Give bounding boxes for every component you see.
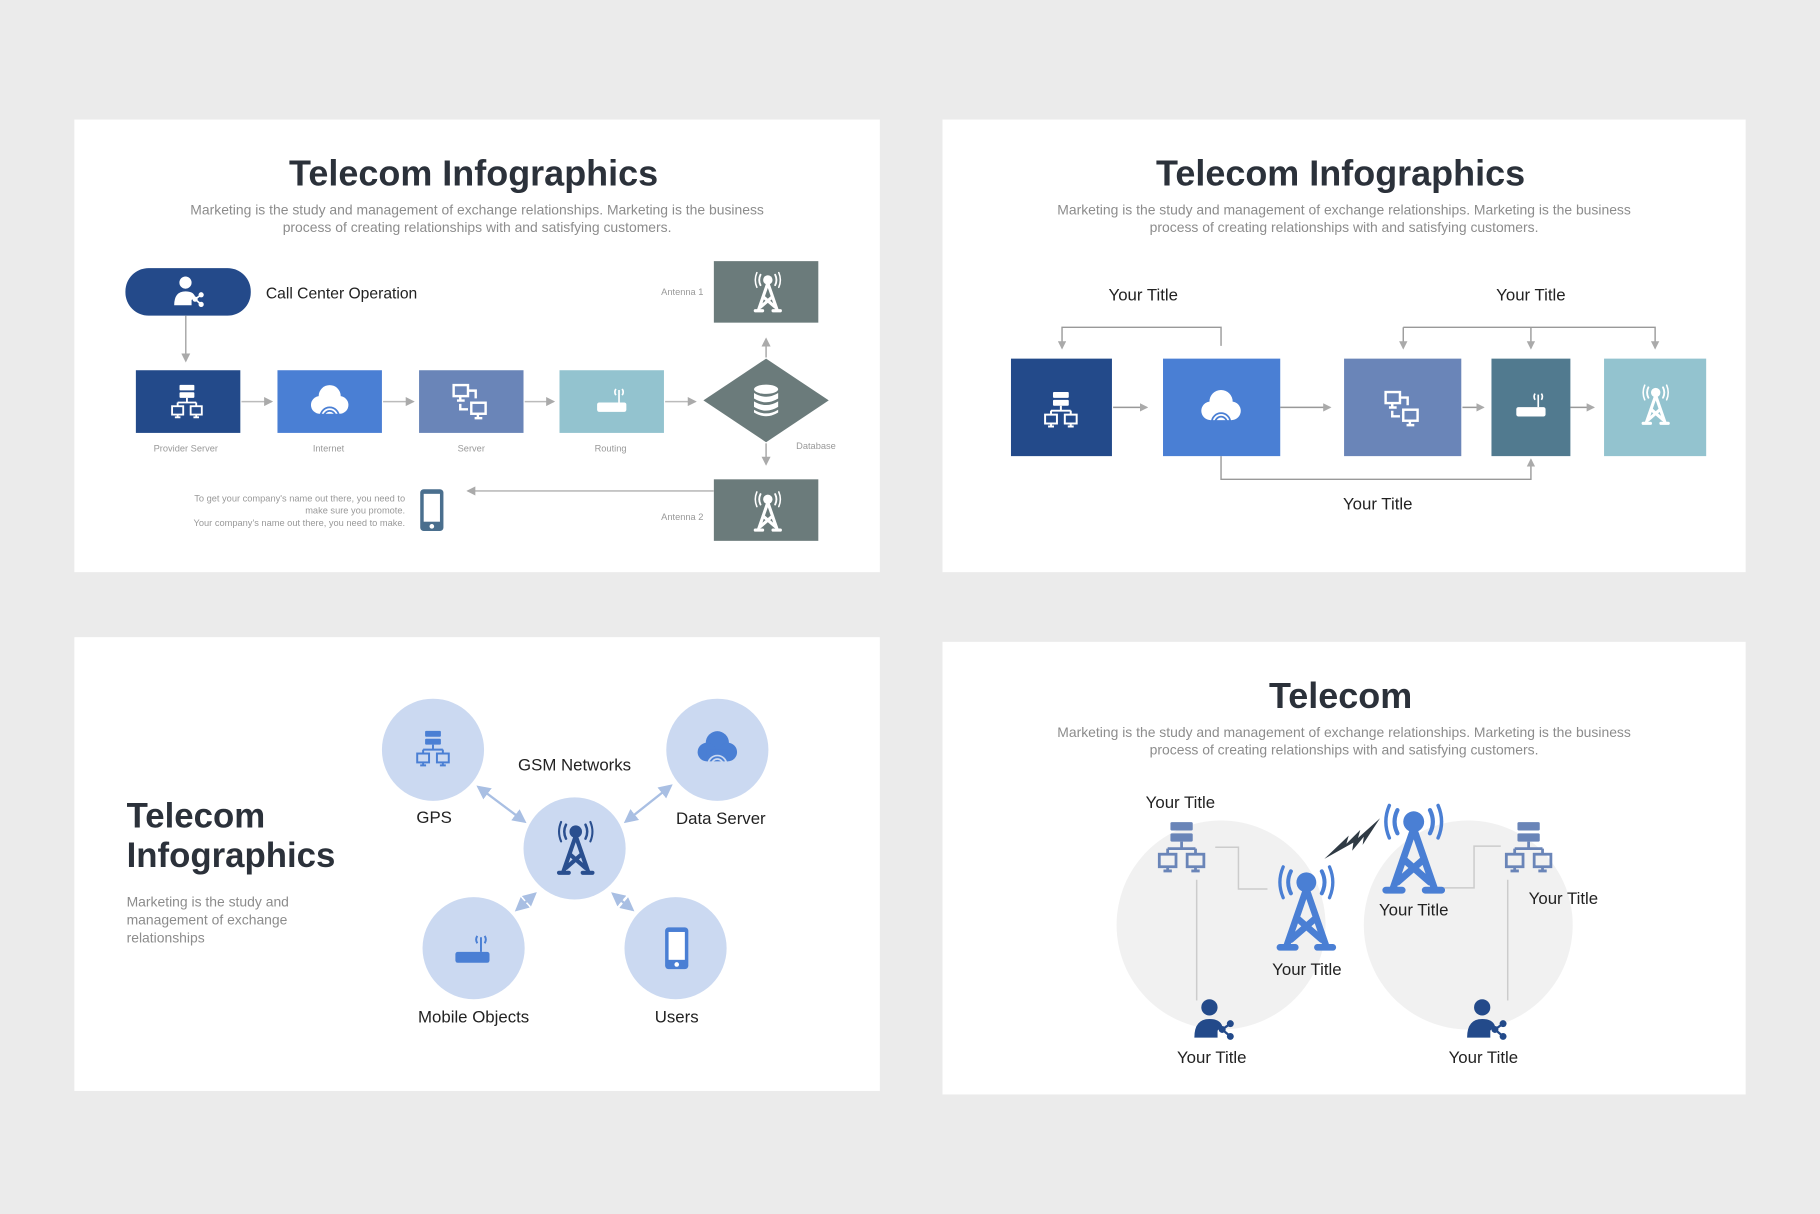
box: provider server: [136, 370, 240, 453]
node: users: Users: [655, 1007, 699, 1026]
node: mobile objects: [418, 897, 529, 1026]
box: provider server: Provider Server: [154, 443, 218, 453]
panel: process titles: Your Title: [1496, 286, 1566, 305]
box: server: [419, 370, 524, 453]
panel: call center flow: [74, 120, 880, 572]
labels: Your Title: [1109, 286, 1178, 305]
arrow down: [185, 316, 187, 361]
flow arrows: [241, 401, 695, 403]
box: server: Server: [458, 443, 485, 453]
panel: telecom towers: Your Title: [1449, 1048, 1518, 1067]
boxes: [1011, 359, 1112, 456]
arrow left: [468, 490, 714, 492]
call center label: Call Center Operation: [266, 285, 417, 302]
subtitle: Marketing is the study and management of exchange relationships. Marketing is the business: [1057, 724, 1631, 740]
icon: phone: [420, 489, 443, 531]
arrows: [478, 786, 671, 910]
antenna 2: [661, 479, 818, 541]
description: Marketing is the study and: [127, 893, 289, 909]
node: mobile objects: Mobile Objects: [418, 1007, 529, 1026]
connectors: [1062, 327, 1655, 479]
subtitle: process of creating relationships with and satisfying customers.: [1150, 219, 1538, 235]
node: GSM center: [518, 756, 631, 899]
subtitle: Marketing is the study and management of exchange relationships. Marketing is the business: [190, 202, 764, 218]
call center pill: [125, 268, 251, 316]
diamond: database: Database: [796, 441, 836, 451]
diamond: database: [703, 359, 836, 451]
description: relationships: [127, 929, 205, 945]
icon: lightning: [1324, 818, 1380, 859]
left group: [1146, 793, 1215, 871]
panel: process titles: Your Title: [1343, 495, 1412, 514]
title: Telecom Infographics: [1156, 153, 1525, 194]
connectors: [1197, 846, 1508, 1000]
box: internet: Internet: [313, 443, 345, 453]
title: Telecom: [127, 797, 265, 836]
antenna 1: Antenna 1: [661, 287, 703, 297]
subtitle: process of creating relationships with and satisfying customers.: [283, 219, 671, 235]
box: internet: [277, 370, 382, 453]
note text: Your company's name out there, you need to make.: [194, 518, 405, 528]
panel: telecom towers: [942, 642, 1746, 1094]
node: GPS: [382, 699, 484, 827]
title: Infographics: [127, 836, 335, 875]
panel: telecom towers: Your Title: [1272, 960, 1342, 979]
node: GSM center: GSM Networks: [518, 756, 631, 775]
subtitle: Marketing is the study and management of exchange relationships. Marketing is the business: [1057, 202, 1631, 218]
right group: Your Title: [1379, 901, 1448, 920]
description: management of exchange: [127, 911, 288, 927]
arrows up/down: [765, 339, 767, 464]
background circles: [1117, 821, 1325, 1029]
box: routing: [559, 370, 664, 453]
panel: GSM network: [74, 637, 880, 1091]
panel: telecom towers: Your Title: [1529, 889, 1598, 908]
panel: process titles: [942, 120, 1746, 572]
note text: make sure you promote.: [305, 506, 405, 516]
node: data server: Data Server: [676, 809, 766, 828]
note text: To get your company's name out there, you need to: [194, 493, 405, 503]
right group: [1379, 805, 1448, 920]
antenna 1: [661, 261, 818, 323]
title: Telecom: [1269, 675, 1412, 716]
antenna 2: Antenna 2: [661, 512, 703, 522]
subtitle: process of creating relationships with and satisfying customers.: [1150, 741, 1538, 757]
node: GPS: GPS: [416, 808, 452, 827]
title: Telecom Infographics: [289, 153, 658, 194]
panel: telecom towers: Your Title: [1177, 1048, 1247, 1067]
node: users: [624, 897, 727, 1026]
left group: Your Title: [1146, 793, 1215, 812]
node: data server: [666, 699, 768, 828]
box: routing: Routing: [595, 443, 627, 453]
